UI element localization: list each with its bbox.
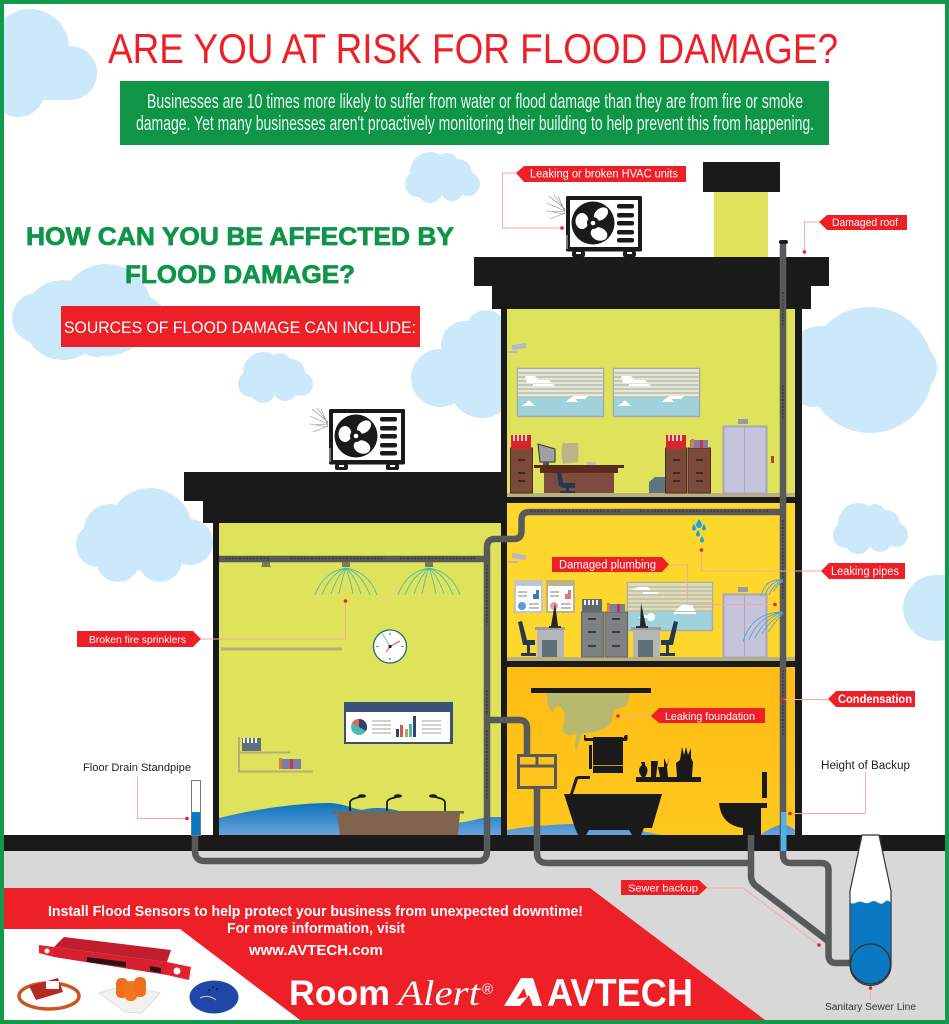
security camera [508, 553, 526, 563]
floor strips [507, 493, 795, 661]
upper office [508, 343, 774, 494]
tag: Damaged plumbing [552, 557, 669, 572]
leader lines [138, 173, 870, 1000]
tag: Leaking foundation [651, 708, 765, 723]
bath tub [564, 776, 662, 835]
main roof and walls [474, 257, 829, 835]
call to action: www.AVTECH.com [248, 943, 383, 959]
tag: Leaking foundation: Leaking foundation [665, 711, 755, 723]
wall charts [514, 580, 575, 613]
binders and books [511, 435, 708, 449]
AVTECH logo: AVTECH [547, 972, 693, 1015]
elevator [724, 587, 766, 658]
chimney [703, 162, 780, 258]
water stain [547, 692, 629, 752]
product: blue disc sensor [190, 980, 238, 1014]
tag: Leaking pipes: Leaking pipes [831, 566, 899, 578]
toilet [719, 772, 767, 835]
workstations [535, 603, 661, 657]
heading [26, 223, 454, 289]
presentation board [344, 702, 453, 744]
building: upper floor background [507, 309, 795, 494]
heading: HOW CAN YOU BE AFFECTED BY [26, 223, 454, 251]
call to action: Install Flood Sensors to help protect your business from unexpected downtime! [48, 904, 583, 920]
sources banner [61, 306, 420, 347]
sources banner: SOURCES OF FLOOD DAMAGE CAN INCLUDE: [64, 319, 416, 337]
tag: Condensation: Condensation [838, 694, 912, 706]
building: left wing [184, 472, 504, 835]
towel on rail [584, 735, 628, 773]
Room Alert logo: Alert [396, 973, 481, 1013]
filing cabinets [510, 448, 710, 493]
printer [649, 477, 665, 493]
filing cabinets [582, 612, 628, 657]
Room Alert logo: ® [482, 981, 493, 998]
tag: Broken fire sprinklers: Broken fire sprinklers [89, 634, 186, 646]
call to action: For more information, visit [227, 921, 405, 937]
ground [4, 835, 945, 1021]
tag: Condensation [828, 691, 915, 707]
office chairs [518, 621, 678, 656]
tag: Sewer backup [621, 880, 707, 895]
wall clock [374, 630, 406, 663]
leader dots [185, 226, 872, 990]
call to action [48, 904, 583, 959]
tag: Leaking pipes [821, 563, 905, 579]
security camera [508, 343, 526, 353]
chairs [557, 443, 578, 493]
right-hand roof ac unit [546, 195, 642, 257]
basement bathroom [531, 688, 767, 835]
label: Floor Drain Standpipe: Floor Drain Standpipe [83, 762, 191, 774]
clouds [0, 9, 949, 641]
product: flood rope sensor [19, 978, 79, 1009]
water drops [692, 519, 706, 542]
windows [518, 368, 700, 416]
product: Room Alert router [39, 937, 191, 980]
tag: Leaking or broken HVAC units [516, 166, 686, 182]
pipe corrosion texture [225, 292, 783, 800]
leaking pipe spray [743, 580, 783, 642]
title: ARE YOU AT RISK FOR FLOOD DAMAGE? [108, 25, 838, 72]
left-wing roof ac unit [309, 408, 405, 470]
label: Height of Backup: Height of Backup [821, 760, 910, 772]
Room Alert logo [289, 973, 493, 1013]
pipes [195, 243, 852, 963]
intro panel [120, 81, 829, 145]
heading: FLOOD DAMAGE? [125, 261, 355, 289]
Room Alert logo: Room [289, 974, 390, 1013]
building: middle floor background [507, 503, 795, 658]
executive desk [534, 462, 624, 493]
building: basement background [507, 667, 795, 835]
catch box [518, 755, 556, 788]
label: Sanitary Sewer Line: Sanitary Sewer Line [825, 1002, 916, 1013]
fire sprinkler spray [315, 568, 460, 595]
tag: Damaged plumbing: Damaged plumbing [559, 560, 656, 572]
wall shelves [239, 737, 313, 772]
tag: Damaged roof [819, 215, 907, 230]
tag: Leaking or broken HVAC units: Leaking or broken HVAC units [530, 168, 678, 180]
middle office [508, 519, 783, 658]
tag: Broken fire sprinklers [77, 631, 201, 647]
monitor [538, 444, 555, 465]
product: orange sponge on white pads [99, 977, 160, 1013]
backup water in vent pipe [781, 812, 786, 851]
podium [333, 794, 464, 835]
elevator [724, 419, 774, 494]
sprinkler heads [261, 562, 433, 567]
flood water [219, 803, 795, 835]
wall rail [221, 648, 342, 650]
bottom red banner [4, 888, 765, 1020]
floor drain standpipe gauge [192, 780, 200, 836]
window [628, 582, 712, 630]
left-wing interior [221, 562, 464, 835]
ceiling bar [531, 688, 651, 693]
sewer tank [850, 835, 891, 986]
tag: Damaged roof: Damaged roof [832, 217, 899, 229]
shelf with plant and bottles [636, 747, 701, 782]
tag: Sewer backup: Sewer backup [628, 882, 698, 894]
